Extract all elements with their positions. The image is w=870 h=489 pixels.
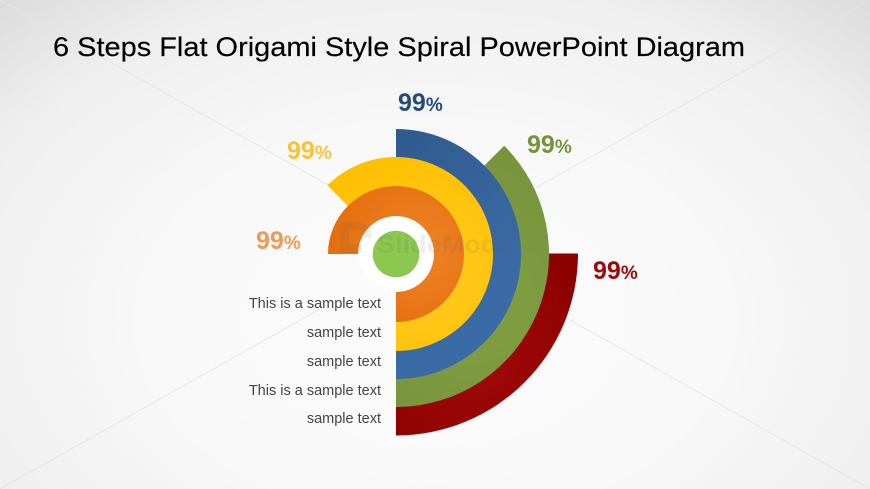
ring: yellow xyxy=(327,157,493,351)
watermark suffix: .com xyxy=(521,246,539,255)
label: yellow 99%: 99% xyxy=(287,137,332,165)
spiral diagram xyxy=(327,129,578,436)
watermark text: SlideModel xyxy=(377,231,520,259)
center circle: green xyxy=(373,231,419,277)
ring: orange xyxy=(328,186,464,322)
watermark xyxy=(340,222,539,259)
label: red 99%: 99% xyxy=(593,257,638,285)
sample text list: sample text xyxy=(307,354,381,370)
ring: blue xyxy=(396,129,521,379)
sample text list: sample text xyxy=(307,411,381,427)
title: 6 Steps Flat Origami Style Spiral PowerPoint Diagram xyxy=(53,32,745,62)
sample text list: This is a sample text xyxy=(249,383,381,399)
ring: red xyxy=(396,254,578,436)
ring: green xyxy=(396,146,549,407)
label: blue 99%: 99% xyxy=(398,89,443,117)
sample text list: This is a sample text xyxy=(249,296,381,312)
center hole xyxy=(359,217,433,291)
label: green 99%: 99% xyxy=(527,131,572,159)
sample text list: sample text xyxy=(307,325,381,341)
label: orange 99%: 99% xyxy=(256,227,301,255)
watermark logo xyxy=(340,222,372,253)
sample text list xyxy=(249,296,381,427)
